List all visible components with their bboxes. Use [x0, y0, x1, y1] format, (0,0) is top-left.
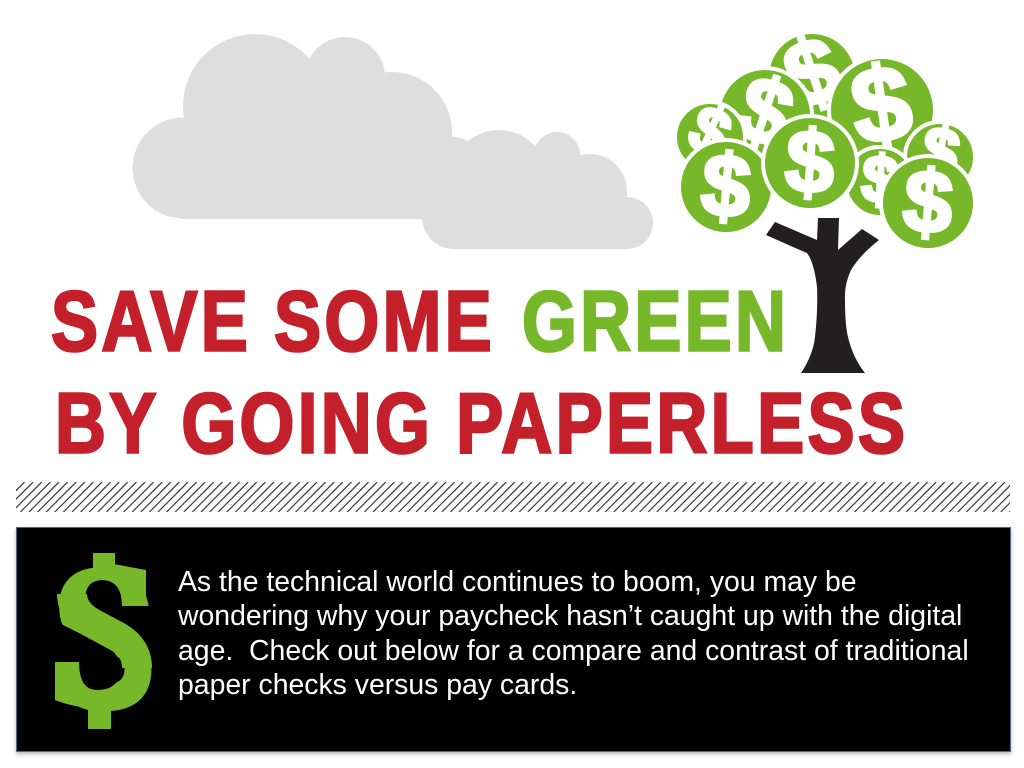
icon: dollar sign: $: [56, 524, 151, 755]
small cloud: [419, 130, 653, 249]
title line 2: BY GOING PAPERLESS: [55, 375, 905, 471]
coin cluster: $: [844, 43, 919, 168]
title line 1: SAVE SOME: [51, 273, 492, 369]
icon: money tree: [675, 17, 975, 373]
title line 1: GREEN: [522, 273, 786, 369]
coin cluster: $: [679, 90, 742, 172]
tree trunk: [766, 218, 879, 373]
coin cluster: $: [725, 56, 805, 168]
hatched divider: [16, 482, 1010, 512]
coin cluster: $: [782, 110, 838, 213]
coin cluster: $: [915, 111, 966, 191]
coin cluster: $: [899, 150, 957, 253]
coin cluster: $: [697, 134, 755, 237]
large cloud: [132, 34, 452, 219]
title line 1: [51, 273, 786, 369]
coin cluster: $: [772, 17, 852, 129]
intro text: age. Check out below for a compare and contrast of traditional: [178, 635, 969, 667]
coin cluster: $: [859, 141, 901, 217]
intro text: wondering why your paycheck hasn’t caught up with the digital: [177, 600, 962, 632]
title: [51, 273, 905, 471]
intro text: As the technical world continues to boom, you may be: [178, 566, 857, 598]
panel: introduction: [16, 524, 1010, 755]
intro text: [177, 566, 969, 701]
intro text: paper checks versus pay cards.: [178, 669, 577, 701]
coin cluster: [675, 17, 975, 253]
